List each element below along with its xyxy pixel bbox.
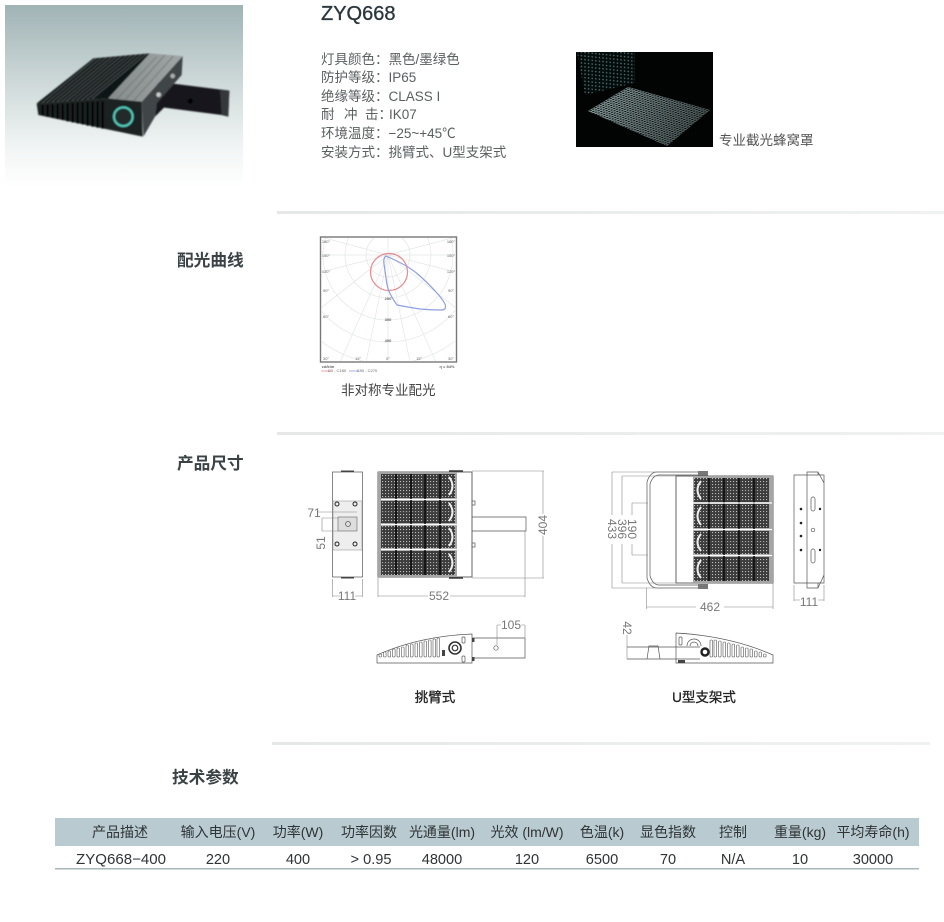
polar light distribution chart: cd/klm: [322, 364, 335, 369]
table header: 显色指数: [640, 824, 696, 840]
table row: 70: [660, 852, 676, 868]
dimension lines: 51: [314, 536, 328, 550]
polar light distribution chart: 180°: [447, 239, 456, 244]
table row: 6500: [586, 852, 618, 868]
specification list: 灯具颜色：黑色/墨绿色: [321, 51, 460, 67]
polar light distribution chart: 15°: [416, 356, 422, 361]
polar light distribution chart: 90°: [323, 288, 329, 293]
polar light distribution chart: 150°: [447, 253, 456, 258]
table row: [55, 852, 919, 870]
dimension lines: 433: [605, 519, 619, 539]
drawing: arm mount side view: 105: [501, 618, 521, 632]
product title: ZYQ668: [321, 3, 395, 25]
polar light distribution chart: C90 - C270: [357, 368, 378, 373]
dimension lines: 111: [800, 595, 818, 609]
dimension lines: 111: [338, 589, 356, 603]
polar light distribution chart: 30°: [448, 356, 454, 361]
technical parameters table: [55, 818, 919, 870]
table header: 控制: [719, 824, 747, 840]
divider: [272, 742, 930, 745]
table row: 120: [515, 852, 539, 868]
polar light distribution chart: 60°: [323, 314, 329, 319]
specification list: [321, 51, 507, 160]
U bracket: [647, 472, 704, 588]
dimension lines: 404: [536, 515, 550, 535]
drawing caption: U bracket: U型支架式: [672, 690, 736, 705]
table header: 重量(kg): [774, 824, 826, 840]
table row: > 0.95: [351, 852, 391, 868]
specification list: 安装方式：挑臂式、U型支架式: [321, 145, 507, 160]
blue C90-C270 curve: [384, 256, 446, 310]
side elevation: [332, 470, 362, 578]
drawing caption: arm mount: 挑臂式: [415, 690, 456, 705]
table header: 光效 (lm/W): [490, 824, 564, 840]
polar light distribution chart: 400: [385, 338, 392, 343]
polar light distribution chart: 90°: [448, 288, 454, 293]
table header: 功率(W): [273, 824, 323, 840]
table row: ZYQ668−400: [76, 852, 166, 868]
table header: 输入电压(V): [181, 824, 255, 840]
specification list: 击：: [365, 107, 392, 122]
drawing: arm mount plan view: [307, 470, 550, 603]
table header: [55, 818, 919, 846]
polar light distribution chart: 30°: [323, 356, 329, 361]
luminaire body with LED modules: [378, 471, 475, 578]
polar light distribution chart: [320, 236, 458, 372]
table header: 光通量(lm): [409, 824, 475, 840]
side elevation: [794, 472, 824, 588]
specification list: 绝缘等级：CLASS I: [321, 88, 440, 104]
specification list: 环境温度：−25~+45℃: [321, 126, 456, 141]
specification list: 冲: [344, 107, 358, 122]
divider: [277, 211, 944, 214]
product photo: luminaire: [5, 5, 243, 188]
dimension lines: 190: [625, 519, 639, 539]
honeycomb louver photo: [576, 52, 713, 147]
polar light distribution chart: 60°: [448, 314, 454, 319]
polar light distribution chart: 120°: [322, 269, 331, 274]
table row: 10: [792, 852, 808, 868]
polar light distribution chart: 200: [385, 296, 392, 301]
polar light distribution chart: η = 84%: [439, 364, 455, 369]
table row: 30000: [853, 852, 893, 868]
heading: technical parameters: 技术参数: [172, 767, 239, 787]
polar light distribution chart: 0°: [386, 356, 390, 361]
table row: 220: [206, 852, 230, 868]
dimension lines: 396: [615, 519, 629, 539]
specification list: IK07: [389, 107, 417, 122]
polar light distribution chart: C0 - C180: [328, 368, 347, 373]
luminaire body with LED modules: [676, 476, 773, 583]
divider: [277, 432, 944, 435]
dimension lines: [605, 472, 824, 614]
red C0-C180 curve: [370, 254, 408, 290]
table header: 功率因数: [341, 824, 397, 840]
polar light distribution chart: 150°: [322, 253, 331, 258]
dimension lines: 552: [429, 589, 449, 603]
polar light distribution chart: 180°: [322, 239, 331, 244]
table row: 400: [286, 852, 310, 868]
polar light distribution chart: 15°: [355, 356, 361, 361]
drawing: U-bracket side view: 42: [620, 621, 634, 635]
heading: light distribution: 配光曲线: [177, 251, 244, 270]
mounting arm: [472, 517, 526, 531]
specification list: 耐: [321, 107, 334, 122]
table row: N/A: [721, 852, 745, 868]
honeycomb caption: 专业截光蜂窝罩: [719, 132, 814, 148]
dimension lines: 71: [307, 506, 321, 520]
polar chart caption: 非对称专业配光: [341, 383, 436, 398]
drawing: arm mount side view: [377, 618, 525, 663]
drawing: U-bracket plan view: [605, 471, 824, 614]
table header: 产品描述: [92, 824, 148, 840]
drawing: U-bracket side view: [620, 621, 773, 663]
heading: dimensions: 产品尺寸: [177, 454, 244, 473]
polar light distribution chart: 120°: [447, 269, 456, 274]
specification list: 防护等级：IP65: [321, 69, 416, 85]
dimension lines: 462: [700, 600, 720, 614]
table header: 色温(k): [580, 824, 624, 840]
table header: 平均寿命(h): [836, 824, 910, 840]
dimension lines: [307, 471, 550, 603]
table row: 48000: [422, 852, 462, 868]
polar light distribution chart: 300: [385, 317, 392, 322]
